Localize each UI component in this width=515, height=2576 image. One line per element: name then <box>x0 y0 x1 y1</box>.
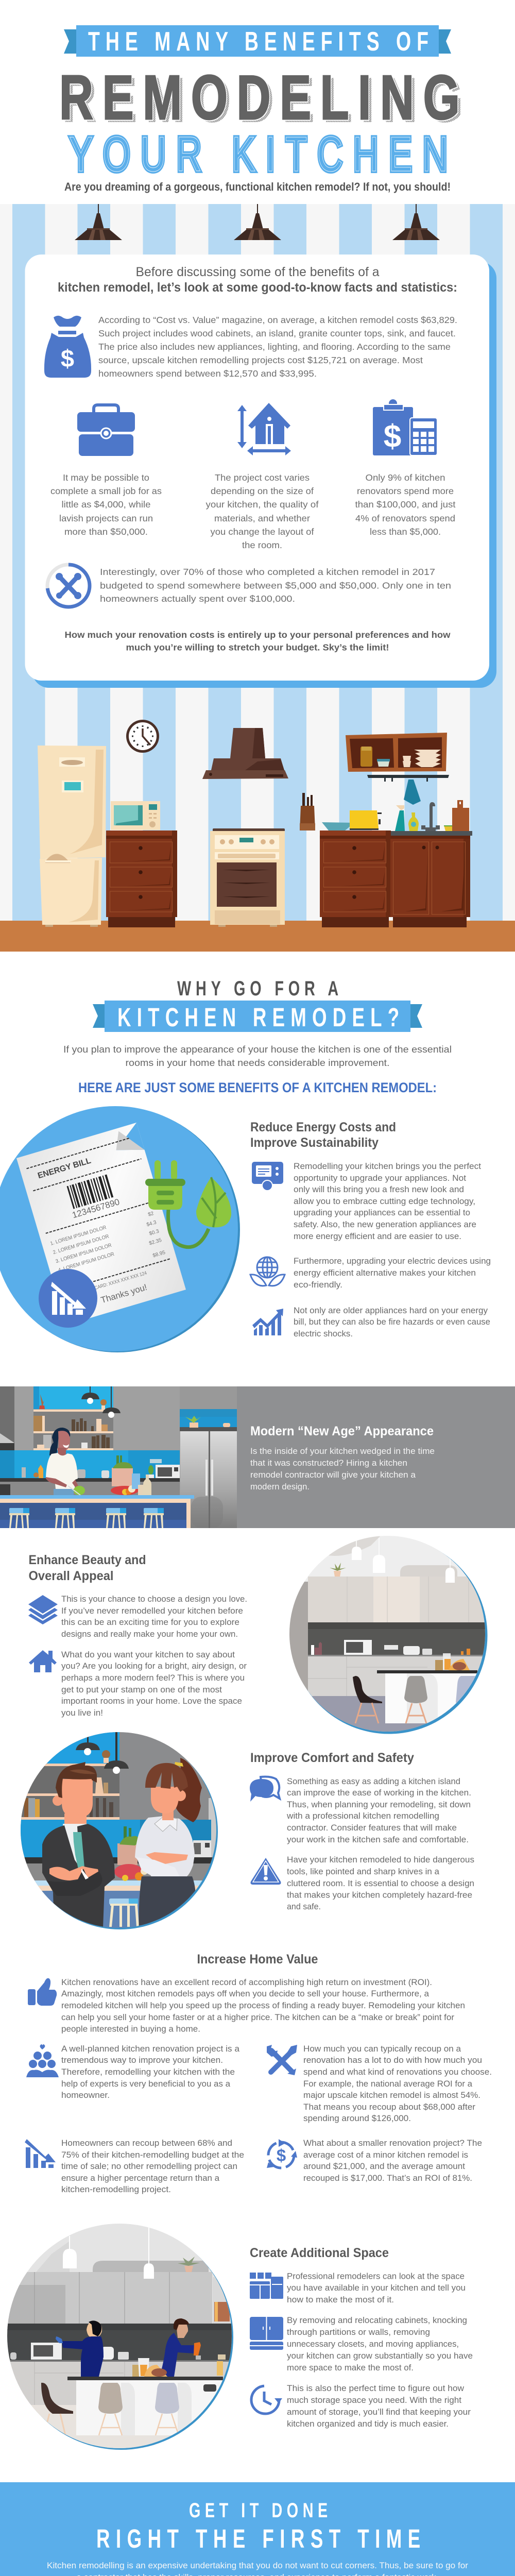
text: choose a design: this can be an exciting time for you to explore <box>61 1618 239 1627</box>
icon: money bag <box>44 316 91 378</box>
illustration: kitchen floor <box>0 921 515 952</box>
text: removing cabinets: unnecessary closets, and moving appliances, <box>287 2340 459 2349</box>
text: use space: you have available in your kitchen and tell you <box>287 2283 466 2293</box>
card heading: Before discussing some of the benefits of a <box>136 265 380 279</box>
text: recoup percentage <box>61 2139 244 2194</box>
title: remodeling: REMODELING <box>59 62 460 132</box>
icon: clock arrow <box>251 2386 282 2414</box>
text: say about you: you live in! <box>61 1708 103 1718</box>
text: fire hazards: Not only are older appliances hard on your energy <box>294 1306 488 1315</box>
receipt: $4.3 <box>146 1219 158 1228</box>
text: recoup: major upscale kitchen remodel is almost 54%. <box>303 2091 480 2100</box>
text: percent of renovators: renovators spend more <box>357 486 454 496</box>
icon: warning <box>250 1858 281 1885</box>
text: well planned project: homeowner. <box>61 2091 110 2100</box>
illustration: modern kitchen with woman cooking <box>0 1386 237 1528</box>
text: minor remodel: What about a smaller renovation project? The <box>303 2139 482 2148</box>
text: modern appearance <box>250 1447 435 1492</box>
illustration: business couple circle <box>18 1728 224 1935</box>
illustration: bright kitchen circle <box>288 1535 489 1737</box>
card heading <box>58 265 457 295</box>
ribbon: kitchen remodel: KITCHEN REMODEL? <box>117 1003 399 1032</box>
receipt: 2. LOREM IPSUM DOLOR <box>53 1233 110 1256</box>
text: removing cabinets: your kitchen can grow substantially so you have <box>287 2351 473 2361</box>
text: small job: complete a small job for as <box>50 486 162 496</box>
illustration: wall clock <box>126 720 159 753</box>
text: kitchen island: Something as easy as adding a kitchen island <box>287 1777 460 1786</box>
text: recoup: For example, the national average ROI for a <box>303 2079 473 2089</box>
text: average cost: Such project includes wood cabinets, an island, granite counter tops, sink, and faucet. <box>98 328 456 338</box>
text: recoup: That means you recoup about $68,000 after <box>303 2103 476 2112</box>
card heading: kitchen remodel, let’s look at some good-to-know facts and statistics: <box>58 280 457 295</box>
text: upgrade appliances <box>294 1162 481 1241</box>
worker right <box>160 2318 201 2377</box>
text: well planned project <box>61 2044 240 2100</box>
heading: modern appearance: Modern “New Age” Appearance <box>250 1424 434 1438</box>
illustration: knife block <box>300 793 315 831</box>
text: project cost: you change the layout of <box>210 527 314 537</box>
icon: clipboard and calculator <box>373 399 437 455</box>
icon: thumbs up <box>28 1978 57 2006</box>
text: recoup: spending around $126,000. <box>303 2114 411 2123</box>
icon: smart appliance <box>252 1162 283 1191</box>
text: upgrade appliances: only will this bring you a fresh new look and <box>294 1185 464 1194</box>
text: recoup: renovation has a lot to do with how much you <box>303 2056 482 2065</box>
heading: improve comfort: Improve Comfort and Safety <box>250 1751 414 1765</box>
icon: wrench ring <box>47 565 90 607</box>
receipt <box>16 1123 186 1325</box>
panel: call to action band <box>0 2482 515 2576</box>
text: upgrade appliances: upgrading your appliances can be essential to <box>294 1208 470 1217</box>
text: hide dangerous tools: cluttered room. It is essential to choose a design <box>287 1879 474 1888</box>
icon: rising chart <box>252 1309 283 1335</box>
text: return on investment: Amazingly, most kitchen remodels pays off when you decide to sell your house. Furthermore, a <box>61 1989 430 1998</box>
text: hide dangerous tools: tools, like pointed and sharp knives in a <box>287 1867 440 1876</box>
icon: pendant lamps <box>75 204 440 240</box>
text: removing cabinets <box>287 2316 473 2372</box>
text: eco friendly: eco-friendly. <box>294 1280 342 1290</box>
text: project cost: materials, and whether <box>214 513 310 523</box>
groceries <box>111 1455 151 1495</box>
heading: reduce energy costs: Improve Sustainability <box>250 1136 379 1150</box>
text: minor remodel: recouped is $17,000. That’s an ROI of 81%. <box>303 2174 472 2183</box>
heading: reduce energy costs: Reduce Energy Costs and <box>250 1120 396 1134</box>
text: eco friendly: energy efficient alternative makes your kitchen <box>294 1268 476 1278</box>
icon: crossed tools <box>267 2045 297 2075</box>
text: minor remodel <box>303 2139 482 2183</box>
text: budgets: budgeted to spend somewhere between $5,000 and $50,000. Only one in ten <box>100 580 451 590</box>
top ribbon banner: THE MANY BENEFITS OF <box>88 26 428 56</box>
text: hide dangerous tools: that makes your kitchen completely hazard-free <box>287 1891 472 1900</box>
text: small job: lavish projects can run <box>59 513 153 523</box>
text: kitchen island: can improve the ease of working in the kitchen. <box>287 1788 471 1798</box>
receipt: $8.95 <box>152 1250 166 1259</box>
text: average cost: According to “Cost vs. Value” magazine, on average, a kitchen remodel costs $63,829. <box>98 315 457 325</box>
text: average cost: homeowners spend between $12,570 and $33,995. <box>98 368 317 379</box>
heading: enhance beauty: Overall Appeal <box>29 1569 113 1583</box>
text: return on investment <box>61 1978 465 2034</box>
heading: enhance beauty <box>29 1553 146 1583</box>
text: recoup percentage: ensure a higher percentage return than a <box>61 2174 220 2183</box>
text: project cost <box>206 472 319 550</box>
text: kitchen island: with a professional kitchen remodelling <box>286 1811 439 1821</box>
text: intro: rooms in your home that needs considerable improvement. <box>126 1058 389 1068</box>
text: kitchen island: your work in the kitchen safe and comfortable. <box>287 1835 469 1844</box>
text: percent of renovators: 4% of renovators spend <box>355 513 455 523</box>
heading: enhance beauty: Enhance Beauty and <box>29 1553 146 1567</box>
title: your kitchen: YOUR KITCHEN <box>69 126 448 182</box>
text: return on investment: Kitchen renovations have an excellent record of accomplishing high return on investment (ROI). <box>61 1978 432 1987</box>
icon: house with dimensions <box>237 403 291 455</box>
text: percent of renovators: less than $5,000. <box>370 527 441 537</box>
text: say about you: What do you want your kitchen to say about <box>61 1650 235 1659</box>
receipt: 3. LOREM IPSUM DOLOR <box>55 1243 112 1264</box>
text: say about you: important rooms in your home. Love the space <box>61 1697 242 1706</box>
text: average cost <box>98 315 457 379</box>
pendant lamps <box>81 1386 121 1418</box>
text: choose a design: designs and really make your home your own. <box>61 1630 238 1639</box>
text: recoup: spend and what kind of renovations you choose. <box>303 2067 492 2077</box>
text: conclusion: much you’re willing to stretch your budget. Sky’s the limit! <box>126 642 389 652</box>
illustration: towel rack <box>367 775 449 805</box>
worker left <box>56 2320 104 2377</box>
text: use space <box>287 2272 466 2304</box>
text: small job: little as $4,000, while <box>62 499 150 510</box>
heading: reduce energy costs <box>250 1120 396 1150</box>
text: removing cabinets: through partitions or walls, removing <box>287 2328 430 2337</box>
text: use space: how to make the most of it. <box>287 2295 394 2304</box>
text: return on investment: can help you sell your home faster or at a higher price. The kitchen can be a “make or break” point for <box>61 2013 455 2022</box>
text: choose a design: This is your chance to choose a design you love. <box>61 1595 247 1604</box>
text: recoup percentage: time of sale; no other remodelling project can <box>61 2162 237 2171</box>
text: fire hazards: bill, but they can also be fire hazards or even cause <box>294 1317 490 1327</box>
illustration: sink cabinet <box>390 831 472 927</box>
text: well planned project: tremendous way to improve your kitchen. <box>61 2056 223 2065</box>
text: say about you: perhaps a more modern feel? This is where you <box>61 1673 245 1683</box>
receipt: $2 <box>147 1211 154 1218</box>
icon: dollar cycle: $ <box>277 2146 286 2165</box>
text: say about you: you? Are you looking for a bright, airy design, or <box>61 1662 247 1671</box>
illustration: microwave <box>111 801 160 830</box>
heading: increase home value: Increase Home Value <box>197 1952 318 1967</box>
panel: modern appearance band <box>0 1386 515 1528</box>
receipt: $2.35 <box>148 1238 163 1246</box>
text: hide dangerous tools <box>287 1855 474 1911</box>
groceries <box>114 1826 148 1881</box>
text: storage: This is also the perfect time to figure out how <box>287 2384 464 2393</box>
text: say about you: get to put your stamp on one of the most <box>61 1685 222 1694</box>
pendant lamps <box>76 1732 129 1774</box>
text: kitchen island: contractor. Consider features that will make <box>287 1823 457 1833</box>
text: recoup: How much you can typically recoup on a <box>303 2044 461 2054</box>
text: project cost: depending on the size of <box>211 486 314 496</box>
text: well planned project: A well-planned kitchen renovation project is a <box>61 2044 240 2054</box>
text: project cost: The project cost varies <box>215 472 310 483</box>
text: call to action: Kitchen remodelling is an expensive undertaking that you do not want to cut corners. Thus, be sure to go for <box>47 2561 468 2570</box>
text: well planned project: help of experts is very beneficial to you as a <box>61 2079 231 2089</box>
text: project cost: your kitchen, the quality of <box>206 499 319 510</box>
text: return on investment: remodeled kitchen will help you speed up the process of finding a ready buyer. Remodeling your kitchen <box>61 2001 465 2010</box>
text: percent of renovators: than $100,000, and just <box>355 499 456 510</box>
bar stools <box>9 1508 164 1528</box>
woman <box>46 1428 85 1495</box>
text: minor remodel: average cost of a minor kitchen remodel is <box>303 2150 468 2160</box>
icon: dollar cycle <box>267 2139 297 2168</box>
receipt: 4. LOREM IPSUM DOLOR <box>58 1251 115 1274</box>
icon: eco globe <box>250 1257 285 1286</box>
text: modern appearance: remodel contractor will give your kitchen a <box>250 1470 416 1480</box>
illustration: energy bill <box>0 1106 240 1352</box>
fridge <box>180 1409 237 1427</box>
text: well planned project: Therefore, remodelling your kitchen with the <box>61 2067 235 2077</box>
text: small job <box>50 472 162 537</box>
illustration: countertop items <box>322 800 469 831</box>
text: kitchen island <box>286 1777 471 1844</box>
icon: plug and leaf <box>145 1160 231 1247</box>
text: budgets: Interestingly, over 70% of those who completed a kitchen remodel in 2017 <box>100 567 435 577</box>
icon: falling chart <box>25 2139 56 2168</box>
text: removing cabinets: more space to make the most of. <box>287 2363 414 2372</box>
text: budgets: homeowners actually spent over $100,000. <box>100 594 295 604</box>
text: upgrade appliances: opportunity to upgrade your appliances. Not <box>294 1174 466 1183</box>
text: percent of renovators <box>355 472 456 537</box>
text: average cost: The price also includes new appliances, lighting, and flooring. According to the same <box>98 342 451 352</box>
text: project cost: the room. <box>242 540 282 550</box>
text: return on investment: people interested in buying a home. <box>61 2025 200 2034</box>
text: kitchen island: Thus, when planning your remodeling, sit down <box>287 1800 471 1809</box>
illustration: wall shelves <box>346 733 447 772</box>
text: upgrade appliances: allow you to embrace cutting edge technology, <box>294 1197 475 1206</box>
text: upgrade appliances: more energy efficient and are easier to use. <box>294 1232 461 1241</box>
text: small job: more than $50,000. <box>64 527 148 537</box>
text: fire hazards: electric shocks. <box>294 1329 353 1338</box>
text: conclusion <box>65 630 451 652</box>
text: upgrade appliances: safety. Also, the new generation appliances are <box>294 1220 476 1229</box>
illustration: stove <box>210 828 285 927</box>
icon: community <box>26 2044 59 2077</box>
receipt: $0.3 <box>148 1228 160 1237</box>
illustration: workers remodeling circle <box>5 2221 237 2452</box>
receipt: 1234567890 <box>71 1197 121 1220</box>
text: storage: amount of storage, you’ll find that keeping your <box>287 2408 471 2417</box>
icon: wardrobe <box>250 2317 283 2350</box>
receipt: 1. LOREM IPSUM DOLOR <box>49 1225 107 1247</box>
subheading: benefits: HERE ARE JUST SOME BENEFITS OF A KITCHEN REMODEL: <box>78 1080 437 1095</box>
text: eco friendly <box>294 1257 491 1290</box>
woman in blouse <box>135 1758 202 1935</box>
title: your kitchen: YOUR KITCHEN <box>69 126 448 182</box>
icon: falling cost chart <box>39 1269 97 1328</box>
text: recoup percentage: 75% of their kitchen-remodelling budget at the <box>61 2150 244 2160</box>
text: use space: Professional remodelers can look at the space <box>287 2272 465 2281</box>
text: recoup <box>303 2044 492 2123</box>
heading: get it done: GET IT DONE <box>189 2499 328 2522</box>
text: recoup percentage: Homeowners can recoup between 68% and <box>61 2139 232 2148</box>
text: storage: kitchen organized and tidy is much easier. <box>287 2419 449 2429</box>
heading: right the first time: RIGHT THE FIRST TIME <box>96 2524 420 2553</box>
icon: home <box>29 1650 57 1672</box>
text: small job: It may be possible to <box>63 472 149 483</box>
icon: clipboard and calculator: $ <box>384 419 401 454</box>
icon: layers <box>28 1595 58 1624</box>
icon: briefcase <box>77 405 135 456</box>
illustration: fridge <box>38 745 106 927</box>
text: modern appearance: modern design. <box>250 1482 310 1492</box>
panel: statistics card <box>25 255 496 688</box>
text: percent of renovators: Only 9% of kitchen <box>366 472 445 483</box>
illustration: right cabinet with drawers <box>320 831 391 927</box>
text: intro <box>63 1044 452 1068</box>
heading: create additional space: Create Additional Space <box>250 2246 389 2260</box>
title: remodeling: REMODELING <box>62 64 463 135</box>
illustration: range hood <box>202 728 288 779</box>
icon: money bag: $ <box>61 345 74 372</box>
receipt: CARD: XXXX XXX XXX 124 <box>94 1270 147 1291</box>
text: budgets <box>100 567 451 604</box>
text: hide dangerous tools: and safe. <box>287 1902 321 1911</box>
text: intro: If you plan to improve the appearance of your house the kitchen is one of the essential <box>63 1044 452 1055</box>
text: upgrade appliances: Remodelling your kitchen brings you the perfect <box>294 1162 481 1171</box>
text: modern appearance: Is the inside of your kitchen wedged in the time <box>250 1447 435 1456</box>
text: average cost: source, upscale kitchen remodelling projects cost $125,721 on average. Most <box>98 355 423 365</box>
text: storage <box>287 2384 471 2429</box>
text: minor remodel: around $21,000, and the average amount <box>303 2162 465 2171</box>
icon: storage cabinets <box>250 2273 283 2299</box>
text: storage: much storage space you need. With the right <box>287 2396 461 2405</box>
text: modern appearance: that it was constructed? Hiring a kitchen <box>250 1459 407 1468</box>
text: choose a design: If you’ve never remodelled your kitchen before <box>61 1606 243 1616</box>
icon: speech bubbles <box>250 1776 280 1802</box>
text: recoup percentage: kitchen-remodelling project. <box>61 2185 171 2194</box>
text: conclusion: How much your renovation costs is entirely up to your personal preferences and how <box>65 630 451 640</box>
kitchen island <box>0 1495 194 1499</box>
text: fire hazards <box>294 1306 490 1338</box>
text: choose a design <box>61 1595 247 1639</box>
text: say about you <box>61 1650 247 1718</box>
illustration: left cabinet <box>106 831 177 927</box>
title: remodeling: REMODELING <box>59 62 460 132</box>
receipt: ENERGY BILL <box>37 1157 92 1180</box>
panel: striped kitchen wall <box>0 204 515 921</box>
receipt: Thanks you! <box>100 1282 148 1305</box>
text: eco friendly: Furthermore, upgrading your electric devices using <box>294 1257 491 1266</box>
text: hide dangerous tools: Have your kitchen remodeled to hide dangerous <box>287 1855 474 1865</box>
subtitle: Are you dreaming of a gorgeous, functional kitchen remodel? If not, you should! <box>64 180 451 193</box>
man in suit <box>42 1762 115 1928</box>
text: removing cabinets: By removing and relocating cabinets, knocking <box>287 2316 467 2325</box>
heading: why go for a: WHY GO FOR A <box>177 977 338 1000</box>
text: call to action <box>47 2561 468 2576</box>
